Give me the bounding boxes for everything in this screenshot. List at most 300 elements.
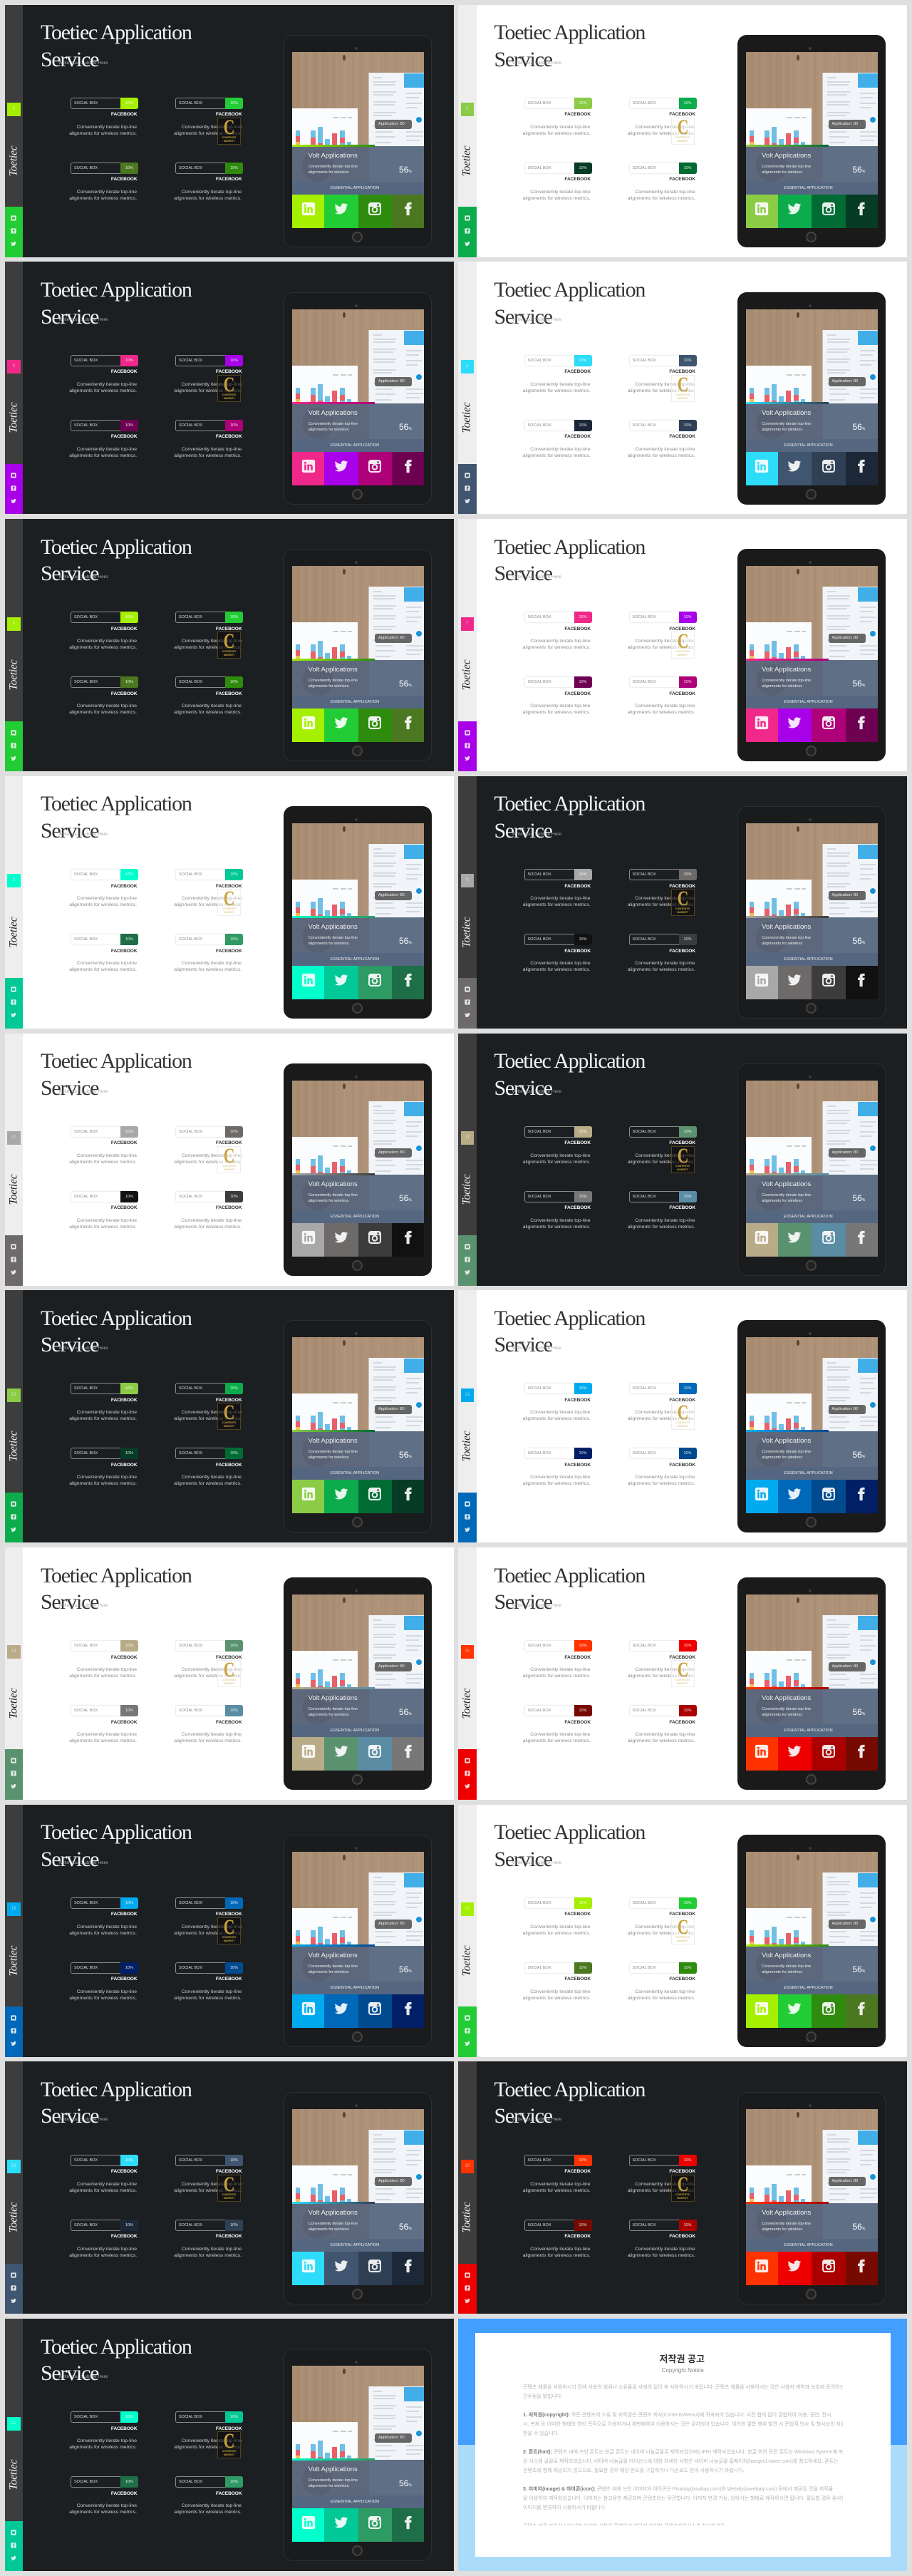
- watermark: MARKET: [677, 1425, 688, 1428]
- social box 3: 10%: [125, 937, 133, 942]
- slide 3: dark pink: [4, 262, 453, 514]
- social box 2: Conveniently iterate top-line: [182, 896, 242, 901]
- social box 1: FACEBOOK: [564, 884, 591, 889]
- social box 4: [628, 2220, 697, 2262]
- social box 1: alignments for wireless metrics.: [69, 388, 137, 393]
- social box 3: Conveniently iterate top-line: [530, 704, 590, 709]
- social box 4: Conveniently iterate top-line: [635, 1989, 695, 1994]
- sidebar: [4, 1034, 23, 1286]
- tablet: alignments for wireless: [762, 170, 802, 175]
- social box 3: FACEBOOK: [564, 2234, 591, 2239]
- title: Service: [494, 48, 552, 71]
- social box 1: FACEBOOK: [111, 2169, 137, 2174]
- social box 2: [175, 1383, 243, 1426]
- social box 4: [628, 1448, 697, 1490]
- social box 1: SOCIAL BOX: [527, 1644, 551, 1648]
- social box 1: FACEBOOK: [111, 1655, 137, 1660]
- social box 1: SOCIAL BOX: [527, 1130, 551, 1134]
- social box 4: alignments for wireless metrics.: [174, 1481, 242, 1486]
- social box 2: [628, 869, 697, 907]
- social box 4: SOCIAL BOX: [179, 1966, 202, 1970]
- social box 2: 10%: [230, 1644, 238, 1648]
- social box 3: Conveniently iterate top-line: [530, 1732, 590, 1737]
- social box 3: 10%: [579, 680, 587, 684]
- copyright body text: 간주됨을 밝힙니다.: [523, 2394, 562, 2399]
- watermark: CONTENTS: [675, 2193, 690, 2196]
- watermark: CONTENTS: [675, 650, 690, 653]
- social box 1: Conveniently iterate top-line: [77, 896, 137, 901]
- title: Toetiec Application: [494, 1307, 645, 1330]
- social box 1: alignments for wireless metrics.: [523, 1674, 590, 1679]
- social box 4: 10%: [683, 1966, 691, 1970]
- social box 2: FACEBOOK: [669, 369, 695, 374]
- tablet: alignments for wireless: [309, 1970, 349, 1974]
- social box 2: [174, 868, 244, 907]
- social box 2: Conveniently iterate top-line: [182, 125, 242, 130]
- social box 4: FACEBOOK: [669, 1977, 695, 1982]
- watermark: [217, 632, 241, 659]
- social box 4: SOCIAL BOX: [633, 1709, 656, 1713]
- social box 2: Conveniently iterate top-line: [635, 1410, 695, 1415]
- tablet: [284, 806, 432, 1019]
- social box 1: Conveniently iterate top-line: [530, 1667, 590, 1672]
- watermark: MARKET: [677, 1682, 688, 1685]
- tablet: ESSENTIAL APPLICATION: [784, 443, 833, 448]
- social box 4: 10%: [230, 423, 238, 428]
- tablet: [284, 2349, 432, 2561]
- social box 4: 10%: [230, 2480, 238, 2484]
- social box 3: alignments for wireless metrics.: [69, 1225, 137, 1230]
- social box 3: alignments for wireless metrics.: [523, 710, 590, 715]
- social box 3: SOCIAL BOX: [74, 1195, 98, 1199]
- social box 4: 10%: [683, 166, 691, 170]
- social box 3: [69, 420, 138, 458]
- social box 3: SOCIAL BOX: [527, 166, 551, 170]
- sidebar: 2: [13, 107, 15, 111]
- social box 3: Conveniently iterate top-line: [77, 447, 137, 452]
- tablet: ESSENTIAL APPLICATION: [784, 1215, 833, 1219]
- social box 4: [174, 676, 243, 715]
- social box 1: alignments for wireless metrics.: [523, 1931, 590, 1936]
- sidebar: Toetiec: [460, 1431, 473, 1462]
- sidebar: [4, 2319, 23, 2571]
- tablet: Volt Applications: [762, 1180, 811, 1188]
- social box 1: alignments for wireless metrics.: [523, 131, 590, 136]
- social box 1: 10%: [125, 2158, 133, 2163]
- social box 2: FACEBOOK: [216, 369, 242, 374]
- social box 4: alignments for wireless metrics.: [628, 1738, 695, 1743]
- social box 2: alignments for wireless metrics.: [174, 645, 242, 650]
- social box 4: Conveniently iterate top-line: [635, 1218, 695, 1223]
- tablet: Application: 80: [378, 1664, 405, 1669]
- slide 4: light cyan: [458, 262, 907, 514]
- social box 4: SOCIAL BOX: [179, 423, 202, 428]
- tablet: alignments for wireless: [762, 1713, 802, 1717]
- watermark: MARKET: [224, 1682, 234, 1685]
- social box 4: SOCIAL BOX: [633, 680, 656, 684]
- social box 2: Conveniently iterate top-line: [182, 1153, 242, 1158]
- sidebar: 7: [466, 622, 468, 626]
- tablet: 56%: [399, 422, 412, 432]
- social box 1: alignments for wireless metrics.: [523, 645, 590, 650]
- social box 3: SOCIAL BOX: [527, 1195, 551, 1199]
- social box 2: Conveniently iterate top-line: [182, 639, 242, 644]
- tablet: 56%: [399, 936, 412, 946]
- social box 3: SOCIAL BOX: [527, 937, 551, 942]
- social box 3: Conveniently iterate top-line: [77, 2503, 137, 2508]
- social box 2: Conveniently iterate top-line: [635, 896, 695, 901]
- title: Service: [41, 305, 98, 329]
- social box 1: 10%: [579, 1901, 587, 1905]
- copyright card: [475, 2333, 891, 2557]
- tablet: Volt Applications: [309, 152, 358, 160]
- watermark: CONTENTS: [222, 2193, 236, 2196]
- sidebar: [4, 2061, 23, 2314]
- tablet: Conveniently iterate top-line: [762, 936, 811, 940]
- social box 2: SOCIAL BOX: [179, 1901, 202, 1905]
- social box 4: SOCIAL BOX: [179, 1451, 202, 1456]
- tablet: Volt Applications: [309, 2209, 358, 2217]
- social box 2: 10%: [683, 1130, 691, 1134]
- tablet: ESSENTIAL APPLICATION: [331, 2243, 379, 2247]
- social box 1: SOCIAL BOX: [527, 872, 551, 877]
- title: Toetiec Application: [41, 1049, 192, 1073]
- title: [494, 1562, 645, 1616]
- sidebar: [4, 262, 23, 514]
- social box 4: FACEBOOK: [216, 1205, 242, 1210]
- tablet: Application: 80: [832, 1150, 858, 1155]
- social box 4: Conveniently iterate top-line: [182, 2503, 242, 2508]
- social box 1: Conveniently iterate top-line: [77, 1925, 137, 1930]
- subtitle: Write Your Subtitle Here: [58, 832, 108, 837]
- social box 4: [174, 934, 244, 972]
- social box 2: 10%: [683, 359, 691, 363]
- sidebar: Toetiec: [7, 2460, 19, 2490]
- social box 1: [69, 868, 138, 907]
- watermark: MARKET: [224, 911, 234, 914]
- copyright body text: 된 시스템 글꼴로 제작되었습니다. 네이버 나눔글꼴 라이선스에 대한 자세한 사항은 네이버 나눔글꼴 홈페이지(hangeul.naver.com)를 참고하세요. 폰트는: [523, 2459, 839, 2464]
- tablet: Volt Applications: [762, 923, 811, 931]
- subtitle: Write Your Subtitle Here: [58, 1860, 108, 1865]
- social box 1: 10%: [125, 359, 133, 363]
- social box 1: [524, 1640, 591, 1683]
- subtitle: Write Your Subtitle Here: [512, 1860, 561, 1865]
- social box 2: [175, 2155, 243, 2198]
- social box 2: 10%: [230, 1130, 238, 1134]
- tablet: Conveniently iterate top-line: [762, 1707, 811, 1711]
- social box 4: 10%: [683, 680, 691, 684]
- watermark: CONTENTS: [222, 136, 236, 139]
- sidebar: [458, 262, 476, 514]
- watermark: MARKET: [677, 1939, 688, 1942]
- social box 1: [523, 355, 593, 393]
- tablet: Volt Applications: [309, 1437, 358, 1445]
- social box 1: 10%: [579, 1130, 587, 1134]
- social box 3: FACEBOOK: [111, 1205, 137, 1210]
- social box 3: alignments for wireless metrics.: [69, 967, 137, 972]
- slide 1: dark lime: [4, 5, 453, 257]
- sidebar: 11: [465, 1135, 470, 1140]
- sidebar: [4, 519, 23, 771]
- tablet: ESSENTIAL APPLICATION: [331, 1215, 379, 1219]
- title: Service: [494, 1333, 552, 1356]
- social box 4: Conveniently iterate top-line: [182, 1732, 242, 1737]
- social box 2: FACEBOOK: [669, 2169, 695, 2174]
- sidebar: Toetiec: [460, 1174, 473, 1205]
- tablet: ESSENTIAL APPLICATION: [331, 700, 379, 704]
- sidebar: Toetiec: [460, 917, 473, 947]
- social box 2: Conveniently iterate top-line: [182, 2182, 242, 2187]
- subtitle: Write Your Subtitle Here: [58, 2374, 108, 2379]
- title: Service: [41, 1848, 98, 1871]
- social box 1: FACEBOOK: [564, 1655, 591, 1660]
- social box 3: 10%: [125, 1709, 133, 1713]
- title: [41, 792, 192, 843]
- tablet: alignments for wireless: [309, 170, 349, 175]
- social box 4: FACEBOOK: [216, 691, 242, 696]
- social box 4: 10%: [230, 1709, 238, 1713]
- tablet: Application: 80: [378, 893, 405, 897]
- tablet: [284, 1320, 432, 1532]
- watermark: [671, 375, 694, 402]
- watermark: MARKET: [224, 1168, 234, 1171]
- social box 2: alignments for wireless metrics.: [174, 1160, 242, 1165]
- tablet: Conveniently iterate top-line: [762, 2222, 811, 2226]
- tablet: [737, 2092, 885, 2304]
- tablet: Conveniently iterate top-line: [309, 936, 358, 940]
- social box 3: [71, 2220, 138, 2262]
- social box 2: [628, 97, 697, 136]
- tablet: Application: 80: [378, 379, 405, 383]
- social box 1: 10%: [125, 1901, 133, 1905]
- social box 3: SOCIAL BOX: [74, 1966, 98, 1970]
- social box 2: 10%: [683, 101, 691, 105]
- slide 19: dark aqua: [4, 2319, 453, 2571]
- social box 2: 10%: [230, 1901, 238, 1905]
- tablet: alignments for wireless: [762, 1970, 802, 1974]
- sidebar: Toetiec: [7, 145, 19, 176]
- social box 4: SOCIAL BOX: [179, 1195, 202, 1199]
- sidebar: 15: [465, 1649, 470, 1654]
- social box 4: alignments for wireless metrics.: [174, 1738, 242, 1743]
- tablet: ESSENTIAL APPLICATION: [784, 186, 833, 190]
- social box 2: [628, 1126, 697, 1169]
- social box 2: SOCIAL BOX: [179, 2415, 202, 2419]
- social box 1: 10%: [125, 2415, 133, 2419]
- tablet: Application: 80: [378, 2436, 405, 2440]
- social box 2: alignments for wireless metrics.: [174, 2445, 242, 2450]
- social box 1: 10%: [125, 615, 133, 619]
- social box 3: 10%: [125, 2223, 133, 2227]
- social box 1: SOCIAL BOX: [527, 615, 551, 619]
- social box 2: FACEBOOK: [669, 884, 695, 889]
- social box 4: SOCIAL BOX: [633, 423, 656, 428]
- tablet: alignments for wireless: [762, 428, 802, 432]
- social box 2: FACEBOOK: [669, 112, 695, 117]
- watermark: MARKET: [224, 2197, 234, 2200]
- social box 2: FACEBOOK: [669, 1655, 695, 1660]
- social box 1: alignments for wireless metrics.: [69, 645, 137, 650]
- social box 2: Conveniently iterate top-line: [635, 1153, 695, 1158]
- social box 3: SOCIAL BOX: [527, 1966, 551, 1970]
- social box 3: Conveniently iterate top-line: [530, 961, 590, 966]
- title: [41, 2076, 192, 2130]
- title: [494, 535, 646, 585]
- tablet: 56%: [852, 1450, 865, 1460]
- social box 2: SOCIAL BOX: [179, 2158, 202, 2163]
- social box 1: Conveniently iterate top-line: [530, 1410, 590, 1415]
- tablet: 56%: [399, 1450, 412, 1460]
- social box 4: SOCIAL BOX: [179, 1709, 202, 1713]
- social box 2: FACEBOOK: [216, 1398, 242, 1403]
- sidebar: Toetiec: [7, 1688, 19, 1719]
- social box 1: Conveniently iterate top-line: [530, 639, 590, 644]
- social box 4: Conveniently iterate top-line: [635, 447, 695, 452]
- social box 3: [69, 934, 138, 972]
- social box 4: SOCIAL BOX: [633, 937, 656, 942]
- tablet: Application: 80: [378, 1922, 405, 1926]
- tablet: ESSENTIAL APPLICATION: [784, 700, 833, 704]
- social box 3: [71, 2476, 138, 2519]
- social box 3: alignments for wireless metrics.: [69, 1481, 137, 1486]
- social box 4: alignments for wireless metrics.: [174, 1996, 242, 2001]
- social box 4: [175, 1962, 243, 2005]
- social box 3: SOCIAL BOX: [74, 2480, 98, 2484]
- social box 4: Conveniently iterate top-line: [182, 2247, 242, 2252]
- social box 4: alignments for wireless metrics.: [628, 1996, 695, 2001]
- social box 1: 10%: [579, 359, 587, 363]
- watermark: MARKET: [677, 1168, 688, 1171]
- watermark: CONTENTS: [222, 1679, 236, 1681]
- watermark: [671, 632, 694, 659]
- social box 3: FACEBOOK: [111, 1977, 137, 1982]
- social box 2: [174, 98, 243, 136]
- social box 2: Conveniently iterate top-line: [182, 1410, 242, 1415]
- social box 3: Conveniently iterate top-line: [77, 961, 137, 966]
- social box 3: alignments for wireless metrics.: [523, 1996, 590, 2001]
- social box 2: [174, 355, 243, 393]
- sidebar: Toetiec: [7, 1945, 19, 1976]
- sidebar: 10: [11, 1135, 16, 1140]
- social box 2: 10%: [683, 1644, 691, 1648]
- sidebar: [458, 776, 476, 1029]
- social box 2: 10%: [683, 872, 691, 877]
- title: [41, 1048, 192, 1101]
- social box 3: alignments for wireless metrics.: [523, 1225, 590, 1230]
- title: Service: [41, 2104, 98, 2128]
- sidebar: 9: [466, 878, 468, 882]
- social box 2: Conveniently iterate top-line: [182, 1925, 242, 1930]
- social box 1: 10%: [579, 1644, 587, 1648]
- tablet: [284, 35, 432, 247]
- sidebar: Toetiec: [7, 660, 19, 690]
- tablet: Conveniently iterate top-line: [309, 165, 358, 169]
- tablet: Application: 80: [832, 1407, 858, 1411]
- title: Service: [494, 1590, 552, 1614]
- social box 2: [628, 355, 697, 393]
- social box 1: [71, 1897, 138, 1940]
- social box 2: FACEBOOK: [216, 627, 242, 632]
- slide 13: light khaki: [4, 1547, 453, 1800]
- tablet: [737, 549, 885, 761]
- tablet: Volt Applications: [762, 1437, 811, 1445]
- social box 1: alignments for wireless metrics.: [69, 2445, 137, 2450]
- social box 3: SOCIAL BOX: [74, 166, 98, 170]
- social box 3: [71, 1448, 138, 1490]
- social box 3: FACEBOOK: [564, 1720, 591, 1725]
- title: Toetiec Application: [494, 1049, 645, 1073]
- tablet: Volt Applications: [309, 666, 358, 674]
- tablet: [284, 292, 432, 505]
- slide 6: light pink: [458, 519, 907, 771]
- subtitle: Write Your Subtitle Here: [512, 575, 561, 579]
- social box 2: alignments for wireless metrics.: [628, 1416, 695, 1421]
- social box 3: [69, 163, 138, 201]
- social box 1: [69, 612, 138, 650]
- tablet: [737, 1577, 885, 1790]
- social box 4: FACEBOOK: [216, 1977, 242, 1982]
- social box 4: [628, 1191, 697, 1234]
- social box 4: 10%: [230, 1195, 238, 1199]
- title: Service: [41, 1076, 98, 1100]
- tablet: ESSENTIAL APPLICATION: [331, 957, 379, 962]
- watermark: CONTENTS: [675, 136, 690, 139]
- social box 1: SOCIAL BOX: [74, 2158, 98, 2163]
- social box 1: alignments for wireless metrics.: [69, 1416, 137, 1421]
- tablet: Application: 80: [832, 379, 858, 383]
- social box 3: SOCIAL BOX: [527, 2223, 551, 2227]
- tablet: Application: 80: [378, 122, 405, 126]
- social box 3: FACEBOOK: [111, 177, 137, 182]
- social box 2: SOCIAL BOX: [633, 1386, 656, 1391]
- social box 1: SOCIAL BOX: [74, 2415, 98, 2419]
- social box 1: [523, 612, 593, 650]
- social box 3: alignments for wireless metrics.: [69, 1996, 137, 2001]
- subtitle: Write Your Subtitle Here: [512, 1346, 561, 1351]
- tablet: 56%: [852, 1707, 865, 1717]
- social box 4: [628, 1962, 697, 2005]
- social box 1: [71, 2155, 138, 2198]
- social box 2: alignments for wireless metrics.: [628, 902, 695, 907]
- social box 1: FACEBOOK: [111, 1912, 137, 1917]
- tablet: alignments for wireless: [309, 684, 349, 689]
- social box 2: alignments for wireless metrics.: [628, 2188, 695, 2193]
- social box 4: FACEBOOK: [669, 1205, 695, 1210]
- social box 2: SOCIAL BOX: [633, 359, 656, 363]
- social box 4: alignments for wireless metrics.: [174, 967, 242, 972]
- tablet: Conveniently iterate top-line: [309, 2478, 358, 2483]
- watermark: CONTENTS: [222, 2450, 236, 2453]
- social box 4: Conveniently iterate top-line: [635, 1732, 695, 1737]
- title: [494, 1305, 645, 1359]
- social box 2: SOCIAL BOX: [633, 615, 656, 619]
- tablet: Volt Applications: [762, 409, 811, 417]
- sidebar: Toetiec: [7, 917, 19, 947]
- tablet: ESSENTIAL APPLICATION: [784, 1986, 833, 1990]
- tablet: ESSENTIAL APPLICATION: [784, 2243, 833, 2247]
- social box 1: 10%: [579, 101, 587, 105]
- tablet: Volt Applications: [309, 2466, 358, 2473]
- social box 2: FACEBOOK: [216, 1912, 242, 1917]
- social box 2: 10%: [230, 615, 238, 619]
- slide 14: light red: [458, 1547, 907, 1800]
- tablet: Volt Applications: [762, 1952, 811, 1959]
- watermark: CONTENTS: [675, 1165, 690, 1168]
- social box 4: 10%: [683, 937, 691, 942]
- tablet: 56%: [399, 2222, 412, 2232]
- social box 3: [69, 676, 138, 715]
- sidebar: [458, 1805, 476, 2057]
